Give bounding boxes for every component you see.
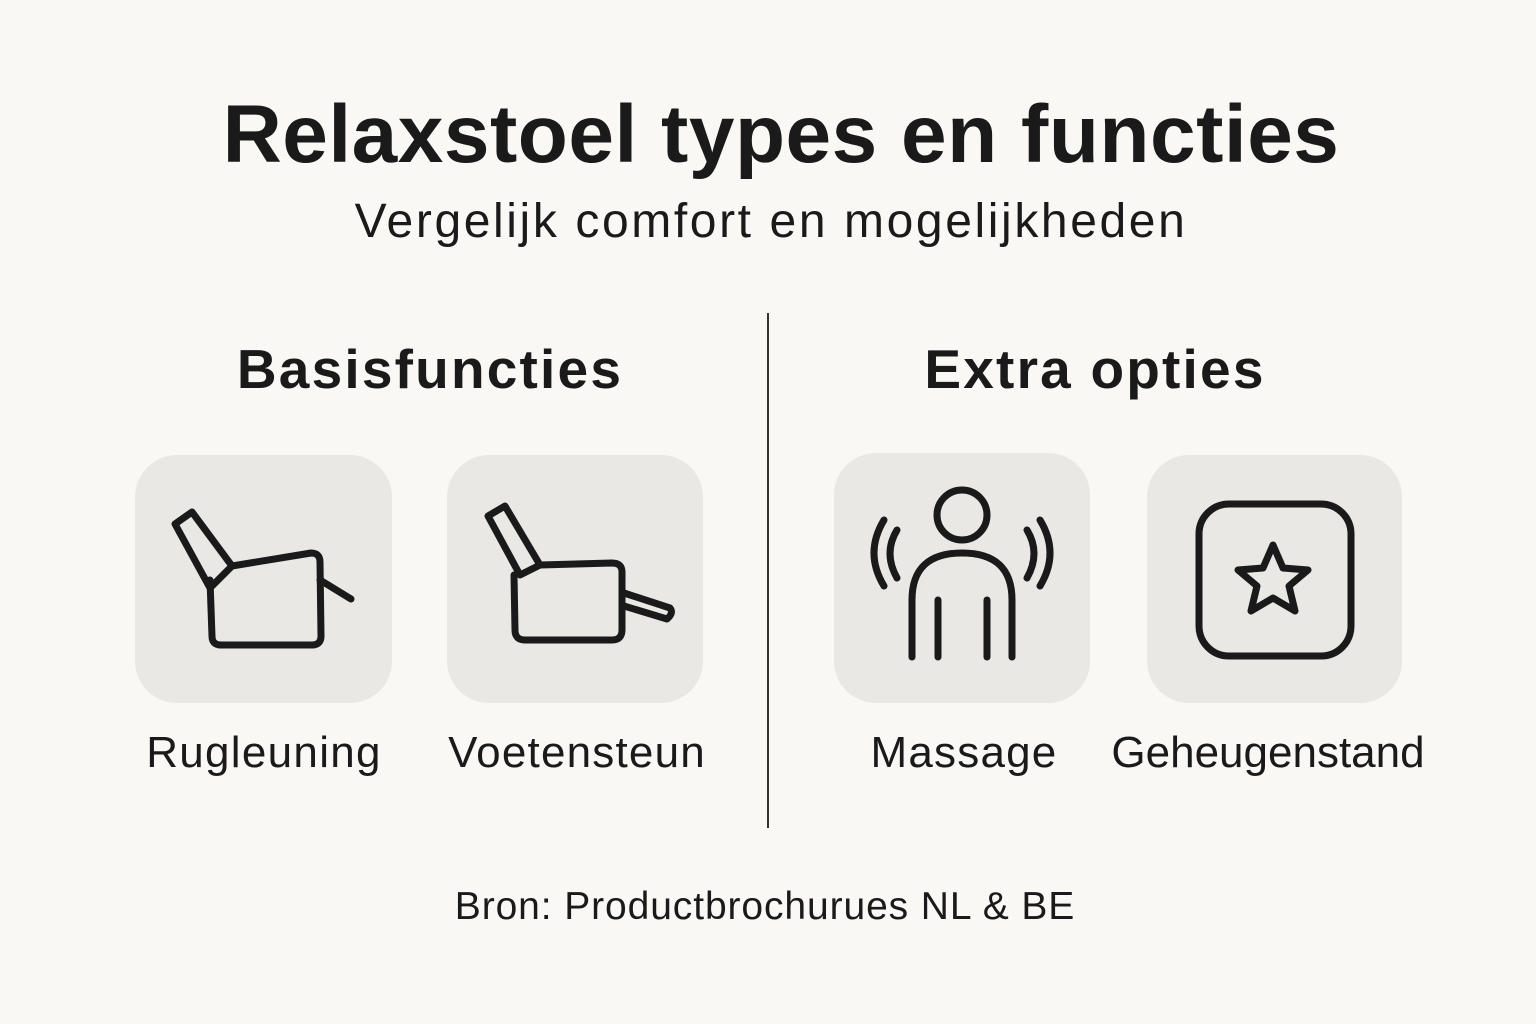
heading: Extra opties: Extra opties xyxy=(924,338,1266,400)
tile: Rugleuning xyxy=(135,455,392,703)
heading: Basisfuncties: Basisfuncties xyxy=(237,338,623,400)
source: Bron: Productbrochurues NL & BE xyxy=(455,885,1075,928)
icon: massage person xyxy=(874,490,1050,657)
tile: Voetensteun xyxy=(447,455,703,703)
label: Rugleuning: Rugleuning xyxy=(146,728,382,777)
tile: Massage xyxy=(834,453,1090,703)
title: Relaxstoel types en functies xyxy=(223,89,1339,180)
icon: footrest chair xyxy=(488,506,671,640)
label: Massage: Massage xyxy=(871,728,1057,777)
icon: recline chair xyxy=(175,512,351,645)
divider xyxy=(767,313,769,828)
subtitle: Vergelijk comfort en mogelijkheden xyxy=(355,195,1187,248)
label: Voetensteun: Voetensteun xyxy=(448,728,706,777)
icon: memory star xyxy=(1199,504,1351,656)
label: Geheugenstand: Geheugenstand xyxy=(1111,728,1425,777)
tile: Geheugenstand xyxy=(1147,455,1402,703)
